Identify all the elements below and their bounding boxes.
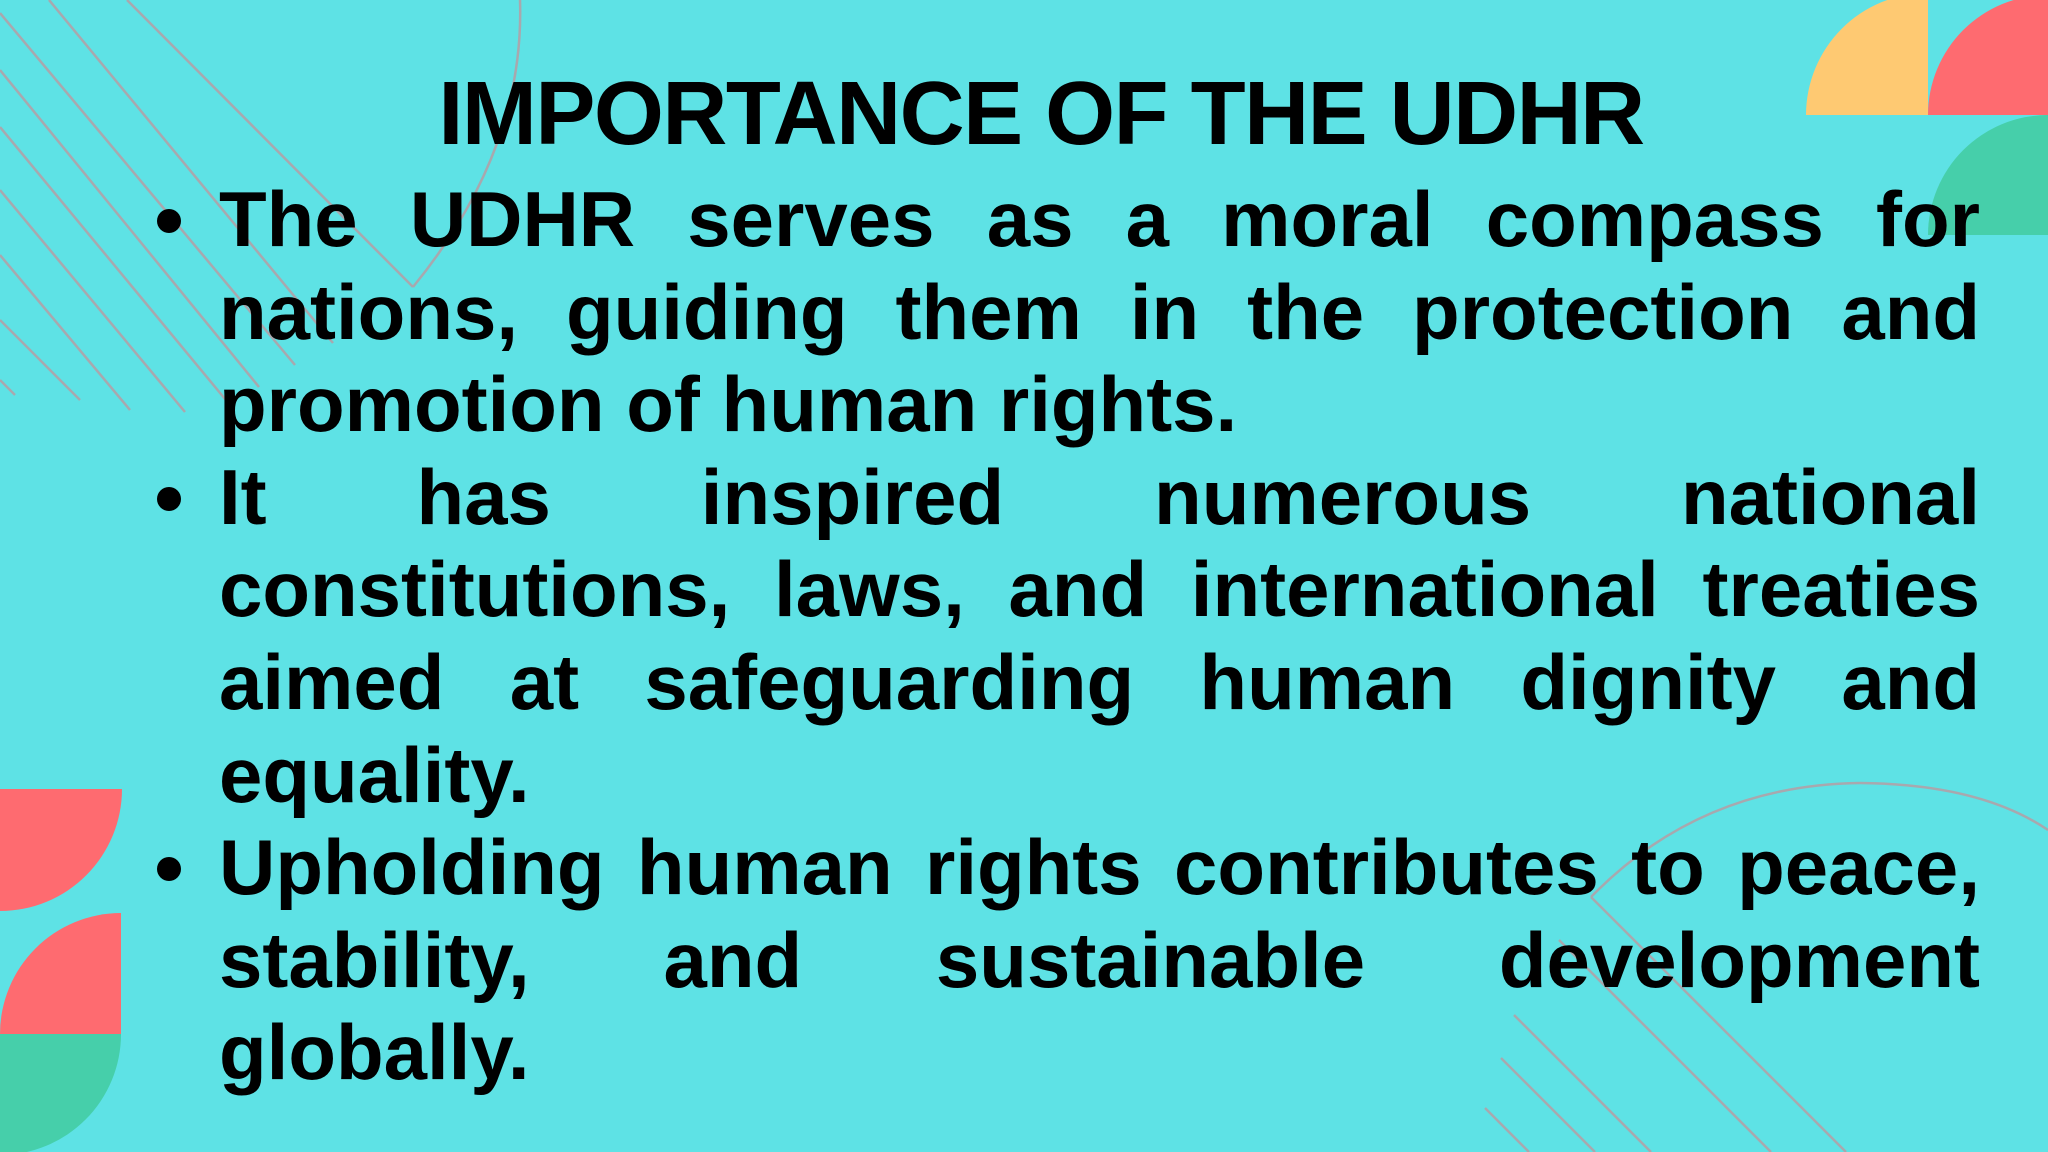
decoration: top-right quarter circles (1806, 0, 2048, 235)
bullet 3: peace and stability: globally. (219, 1008, 530, 1096)
bullet 2: inspired constitutions: equality. (219, 731, 530, 819)
bullet list (157, 175, 1980, 1096)
bullet 3: peace and stability (157, 823, 1980, 1096)
bullet 3: peace and stability: stability, and sustainable development (219, 916, 1980, 1004)
bullet 1: moral compass (157, 175, 1980, 448)
bullet 2: inspired constitutions: It has inspired numerous national (219, 453, 1980, 541)
bullet 3: peace and stability: Upholding human rights contributes to peace, (219, 823, 1980, 911)
decoration: bottom-left quarter circles (0, 789, 122, 1152)
bullet 2: inspired constitutions (157, 453, 1980, 819)
bullet 2: inspired constitutions: constitutions, laws, and international treaties (219, 545, 1980, 633)
bullet 1: moral compass: The UDHR serves as a moral compass for (219, 175, 1980, 263)
bullet 1: moral compass: promotion of human rights. (219, 360, 1237, 448)
bullet 1: moral compass: nations, guiding them in the protection and (219, 268, 1980, 356)
bullet 2: inspired constitutions: aimed at safeguarding human dignity and (219, 638, 1980, 726)
title: IMPORTANCE OF THE UDHR (438, 64, 1644, 164)
